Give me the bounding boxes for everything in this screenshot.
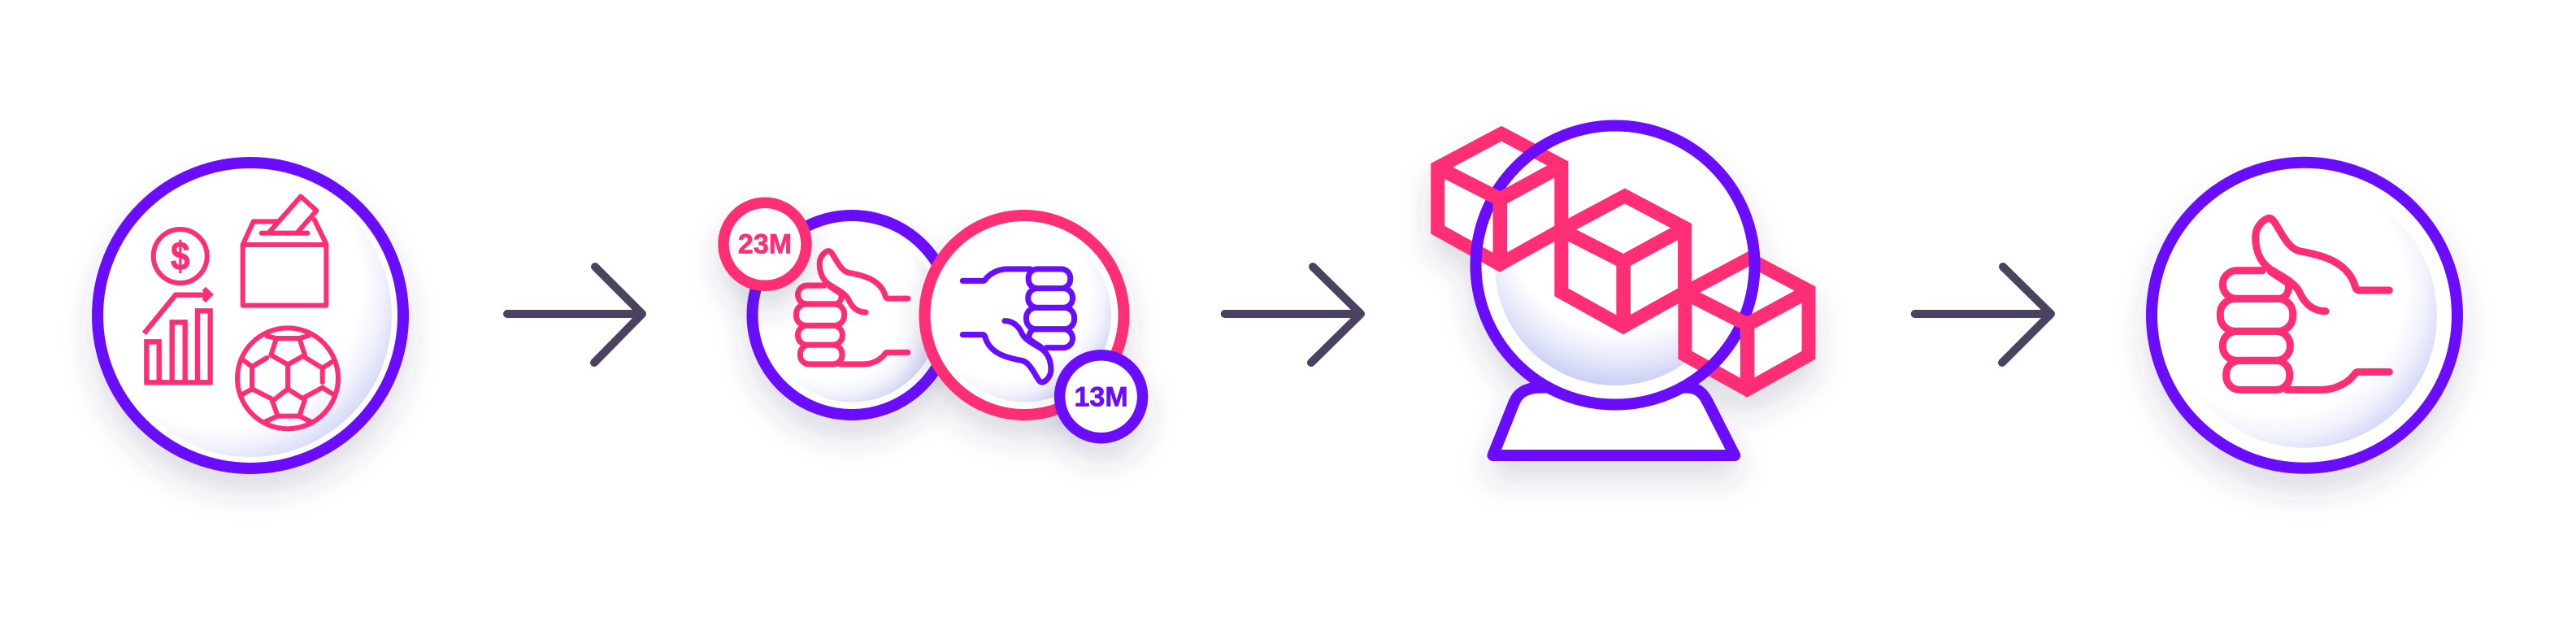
circle with gradient and purple ring bbox=[98, 163, 403, 468]
icon: thumb up bbox=[797, 251, 908, 364]
badge: 13M bbox=[1060, 355, 1143, 438]
panel: outcome circle bbox=[2152, 163, 2457, 468]
thumbs-down circle bbox=[925, 215, 1123, 415]
arrow 3 bbox=[1915, 267, 2051, 363]
left and right cube bodies bbox=[1438, 133, 1809, 389]
badge: 23M bbox=[723, 202, 806, 285]
globe ring bbox=[1476, 125, 1754, 405]
cube inner edges bbox=[1438, 166, 1809, 389]
panel: blockchain globe bbox=[1438, 125, 1809, 455]
icon: thumb up bbox=[2220, 218, 2389, 389]
icon: thumb down bbox=[962, 269, 1075, 382]
globe disc bbox=[1476, 125, 1754, 405]
center cube bbox=[1562, 196, 1685, 327]
icon: ballot box bbox=[243, 197, 326, 306]
circle with gradient and purple ring bbox=[2152, 163, 2457, 468]
icon: dollar coin: $ bbox=[171, 234, 189, 279]
panel: votes for and against bbox=[723, 202, 1143, 438]
badge: 23M: 23M bbox=[738, 229, 792, 260]
thumbs-up circle bbox=[753, 215, 951, 415]
arrow 2 bbox=[1225, 267, 1361, 363]
panel: topics circle bbox=[98, 163, 403, 468]
icon: soccer ball bbox=[237, 328, 338, 429]
badge: 13M: 13M bbox=[1075, 381, 1128, 412]
icon: dollar coin bbox=[154, 229, 207, 283]
globe stand bbox=[1493, 388, 1735, 455]
arrow 1 bbox=[507, 267, 642, 363]
icon: rising bar chart with arrow bbox=[144, 289, 213, 382]
